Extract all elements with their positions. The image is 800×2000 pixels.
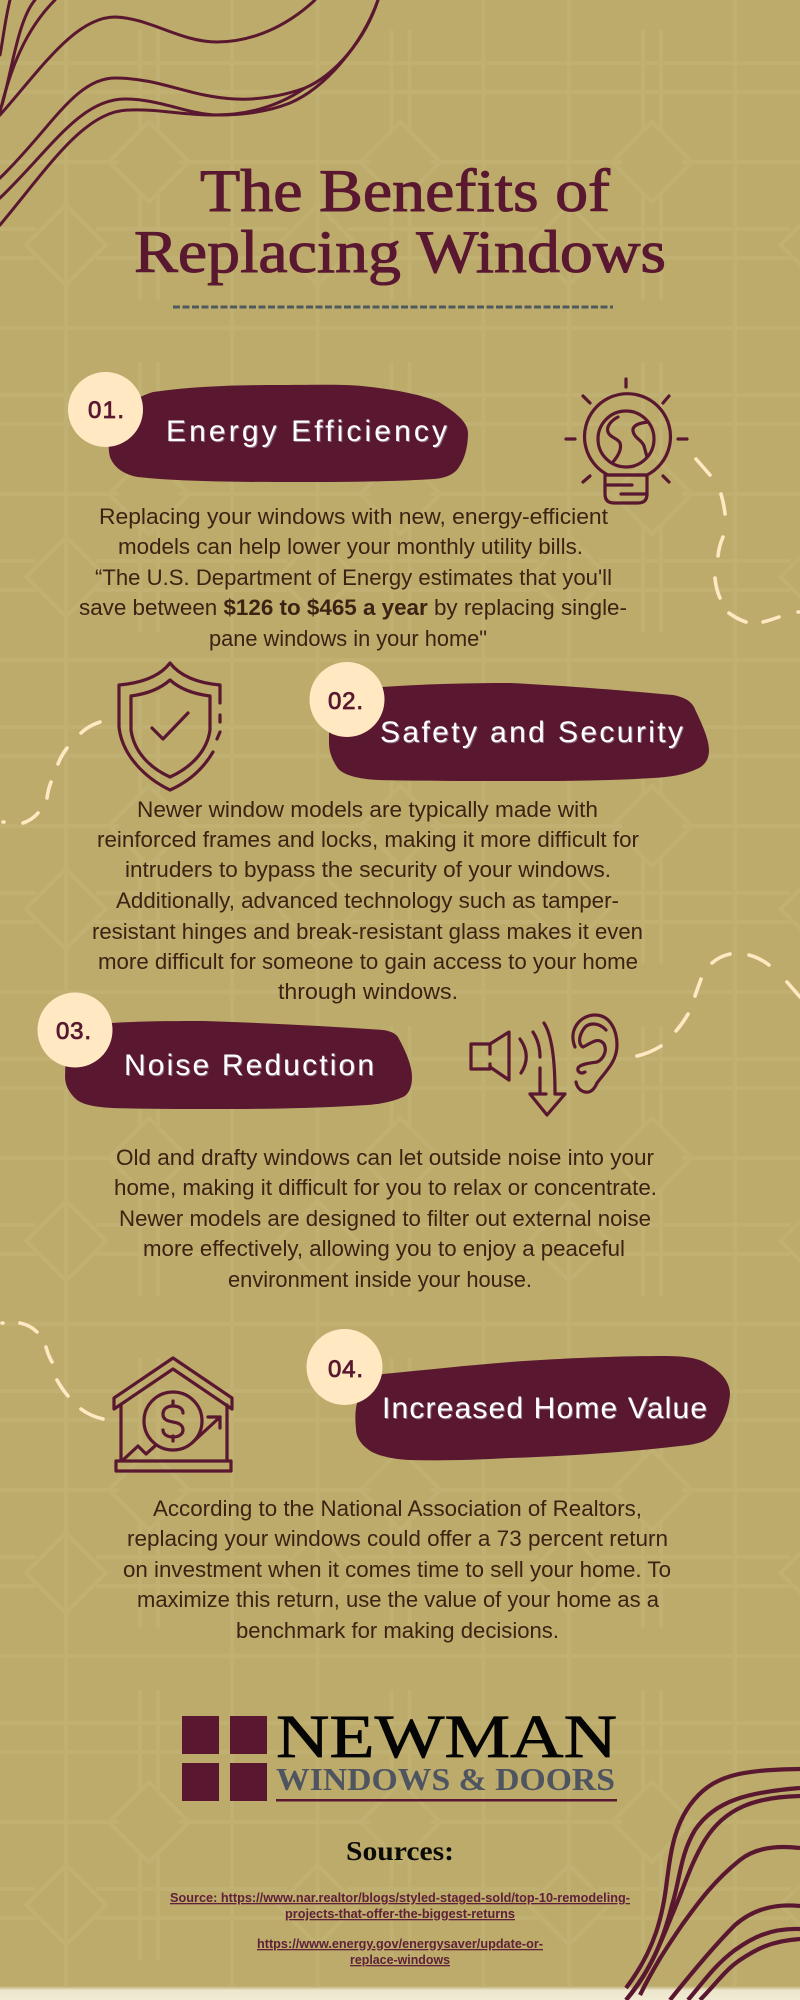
text block 2: reinforced frames and locks, making it more difficult for	[97, 827, 639, 852]
sources list: Source: https://www.nar.realtor/blogs/styled-staged-sold/top-10-remodeling-	[170, 1890, 630, 1905]
label pill 3: Noise Reduction	[124, 1049, 374, 1082]
section 1: energy efficiency	[68, 372, 799, 651]
title divider	[173, 306, 613, 308]
label pill 3: 03.	[56, 1018, 91, 1045]
text block 4	[123, 1496, 671, 1643]
label pill 2: Safety and Security	[380, 716, 683, 749]
title: Replacing Windows	[134, 219, 666, 285]
icon: light bulb globe	[566, 379, 687, 503]
text block 2: Newer window models are typically made with	[137, 797, 598, 822]
text block 2	[92, 797, 643, 1004]
label pill 4: Increased Home Value	[382, 1392, 707, 1425]
dashed connector 4	[2, 1323, 103, 1419]
dashed connector 1	[696, 459, 799, 622]
text block 1	[79, 504, 627, 651]
text block 1: Replacing your windows with new, energy-efficient	[99, 504, 608, 529]
icon: speaker, arrow and ear	[471, 1015, 617, 1115]
section 2: safety and security	[3, 662, 709, 1004]
sources list: replace-windows	[350, 1952, 450, 1967]
decorative waves: top left	[0, 0, 378, 225]
label pill 2	[310, 662, 709, 781]
title	[134, 158, 666, 285]
label pill 1: Energy Efficiency	[166, 415, 447, 448]
sources list: projects-that-offer-the-biggest-returns	[285, 1906, 515, 1921]
dashed connector 3	[637, 954, 800, 1056]
text block 3: home, making it difficult for you to relax or concentrate.	[114, 1175, 657, 1200]
icon: house with dollar	[114, 1358, 232, 1471]
label pill 1: 01.	[88, 397, 124, 424]
section 4: increased home value	[2, 1323, 730, 1643]
text block 2: intruders to bypass the security of your windows.	[125, 857, 611, 882]
label pill 3	[38, 992, 412, 1109]
title: The Benefits of	[200, 158, 610, 224]
text block 1: “The U.S. Department of Energy estimates that you'll	[95, 565, 612, 590]
decorative waves: bottom right	[626, 1769, 800, 2000]
text block 4: maximize this return, use the value of your home as a	[137, 1587, 660, 1612]
logo mark	[182, 1716, 267, 1801]
text block 3	[114, 1145, 657, 1292]
text block 1: models can help lower your monthly utility bills.	[118, 534, 583, 559]
logo: Newman Windows & Doors: WINDOWS & DOORS	[276, 1761, 615, 1797]
text block 3: Old and drafty windows can let outside noise into your	[116, 1145, 654, 1170]
section 3: noise reduction	[38, 954, 800, 1292]
text block 3: environment inside your house.	[228, 1267, 532, 1292]
sources list: https://www.energy.gov/energysaver/update-or-	[257, 1936, 543, 1951]
text block 3: more effectively, allowing you to enjoy a peaceful	[143, 1236, 625, 1261]
label pill 4: 04.	[328, 1356, 363, 1383]
dashed connector 2	[3, 722, 100, 823]
text block 4: benchmark for making decisions.	[236, 1618, 559, 1643]
icon: shield	[119, 663, 220, 790]
label pill 1	[68, 372, 468, 482]
text block 3: Newer models are designed to filter out external noise	[119, 1206, 651, 1231]
label pill 2: 02.	[328, 688, 363, 715]
logo: Newman Windows & Doors: NEWMAN	[276, 1704, 617, 1771]
text block 1: save between $126 to $465 a year by replacing single-	[79, 595, 627, 620]
label pill 4	[306, 1329, 730, 1460]
text block 2: Additionally, advanced technology such as tamper-	[116, 888, 619, 913]
sources heading: Sources:	[346, 1836, 454, 1866]
text block 2: resistant hinges and break-resistant glass makes it even	[92, 919, 643, 944]
sources list	[170, 1890, 630, 1967]
text block 4: replacing your windows could offer a 73 percent return	[127, 1526, 668, 1551]
text block 4: on investment when it comes time to sell your home. To	[123, 1557, 671, 1582]
text block 1: pane windows in your home"	[209, 626, 487, 651]
logo: Newman Windows & Doors	[182, 1704, 617, 1802]
text block 2: through windows.	[278, 979, 458, 1004]
text block 2: more difficult for someone to gain access to your home	[98, 949, 638, 974]
text block 4: According to the National Association of Realtors,	[153, 1496, 642, 1521]
